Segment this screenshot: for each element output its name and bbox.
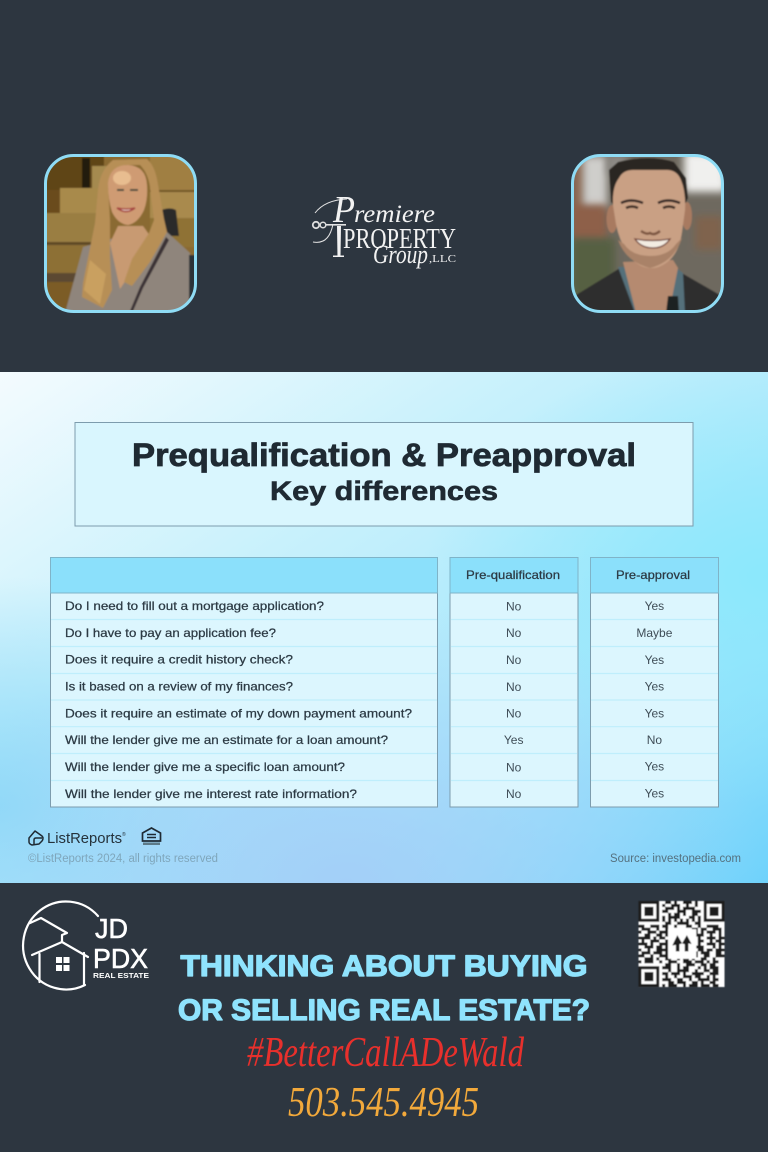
table: pre-qualification column: No	[506, 680, 522, 694]
logo icon: circle and houses	[23, 901, 98, 989]
ListReports logo: ListReports	[47, 830, 122, 847]
table: pre-approval column: Yes	[645, 599, 664, 613]
table: questions: Is it based on a review of my finances?	[65, 680, 293, 694]
table: pre-qualification column: Yes	[504, 733, 523, 747]
source: Source: investopedia.com	[610, 853, 741, 865]
table: pre-qualification column: No	[506, 706, 522, 720]
agent photo: man	[571, 152, 726, 313]
hashtag: #BetterCallADeWald	[247, 1030, 525, 1076]
table: pre-qualification column: No	[506, 626, 522, 640]
ListReports logo: ®	[122, 831, 126, 838]
table: pre-approval column: Pre-approval	[616, 568, 690, 582]
logo: JD: JD	[95, 913, 128, 944]
headline line 1: THINKING ABOUT BUYING	[180, 950, 588, 983]
copyright: ©ListReports 2024, all rights reserved	[28, 853, 218, 865]
subtitle: Key differences	[270, 476, 498, 506]
table: pre-approval column: Yes	[645, 760, 664, 774]
logo: real estate: REAL ESTATE	[93, 971, 149, 980]
table: questions: Does it require an estimate of my down payment amount?	[65, 706, 412, 720]
headline line 2: OR SELLING REAL ESTATE?	[178, 994, 590, 1027]
table: pre-approval column: Yes	[645, 706, 664, 720]
table: questions: Will the lender give me a specific loan amount?	[65, 760, 345, 774]
table: pre-approval column: Yes	[645, 653, 664, 667]
call to action	[178, 950, 590, 1027]
company logo: Premiere Property Group	[313, 189, 456, 269]
table: questions	[50, 558, 438, 807]
table: pre-approval column: No	[647, 733, 662, 747]
table: questions: Do I have to pay an application fee?	[65, 626, 276, 640]
table: pre-approval column: Maybe	[636, 626, 673, 640]
heading box	[75, 422, 693, 526]
table: questions: Do I need to fill out a mortgage application?	[65, 599, 324, 613]
table: pre-approval column	[590, 558, 718, 807]
phone number: 503.545.4945	[288, 1080, 479, 1126]
table: questions: Does it require a credit history check?	[65, 652, 293, 666]
JD PDX real estate logo	[23, 901, 149, 989]
agent photo: woman	[44, 154, 197, 313]
icon: equal housing	[142, 828, 160, 845]
table: pre-qualification column: No	[506, 653, 522, 667]
logo: Group LLC: Group	[373, 240, 428, 269]
table: questions: Will the lender give me an estimate for a loan amount?	[65, 733, 388, 747]
table: pre-qualification column: No	[506, 787, 522, 801]
panel: comparison background	[0, 372, 768, 883]
QR code	[638, 901, 725, 987]
table: pre-qualification column	[450, 558, 578, 807]
table: questions: Will the lender give me interest rate information?	[65, 787, 357, 801]
logo: key and swoosh	[313, 199, 347, 257]
table: pre-qualification column: Pre-qualification	[466, 568, 560, 582]
table: pre-approval column: Yes	[645, 786, 664, 800]
logo: Premiere: P	[332, 189, 355, 231]
logo: PROPERTY: PROPERTY	[343, 223, 456, 255]
company logo: Premiere Property Group: ,LLC	[429, 253, 456, 265]
company logo: Premiere Property Group: remiere	[354, 201, 435, 228]
table: pre-qualification column: No	[506, 760, 522, 774]
table: pre-qualification column: No	[506, 600, 522, 614]
title: Prequalification & Preapproval	[132, 437, 636, 473]
logo: PDX: PDX	[93, 943, 148, 974]
table: pre-approval column: Yes	[645, 680, 664, 694]
